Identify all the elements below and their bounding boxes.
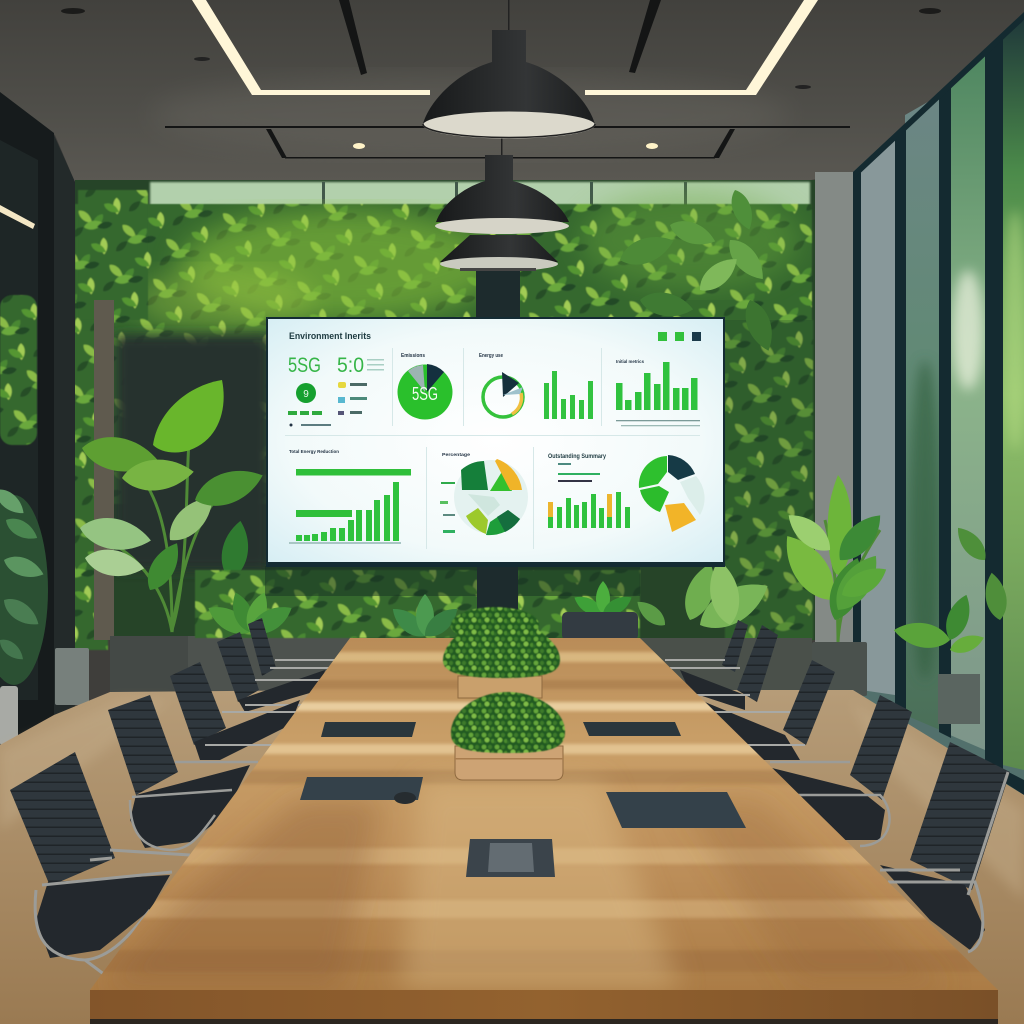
lamp 1 bbox=[423, 30, 595, 138]
far centre chair bbox=[562, 612, 638, 640]
ceiling light strip bbox=[192, 0, 818, 95]
bottom right bar chart: Outstanding Summary bbox=[548, 454, 607, 460]
donut chart with bars: Energy use bbox=[479, 353, 503, 359]
pots and planters bbox=[55, 636, 812, 705]
far table bush bbox=[451, 607, 539, 643]
bottom centre segmented pie: Percentage bbox=[442, 452, 471, 457]
dashboard header: Environment Inerits bbox=[289, 331, 371, 342]
large wall leaves upper right bbox=[616, 187, 779, 355]
bottom left bar chart: Total Energy Reduction bbox=[289, 449, 339, 454]
window strip above plants bbox=[150, 182, 810, 208]
tablets on table bbox=[300, 722, 746, 828]
chair left 3 bbox=[170, 662, 300, 760]
chair right 1 bbox=[880, 742, 1010, 952]
wall display bbox=[266, 317, 725, 567]
chair right 2 bbox=[760, 695, 912, 846]
lamp 2 bbox=[435, 120, 569, 234]
column behind screen bbox=[476, 268, 520, 613]
panel separators bbox=[285, 348, 700, 549]
large tropical plant left bbox=[77, 380, 268, 632]
pie chart 5SG: 5SG bbox=[412, 384, 438, 404]
left hanging vines bbox=[56, 190, 148, 650]
bottom left bar chart bbox=[289, 449, 411, 544]
metric panel: 5:0 bbox=[337, 354, 364, 377]
dashboard header bbox=[289, 331, 701, 342]
pot bbox=[0, 686, 18, 746]
chair left 4 bbox=[217, 632, 325, 712]
left dark wall bbox=[0, 92, 75, 745]
chair left 1 bbox=[10, 752, 190, 975]
ceiling bbox=[0, 0, 1024, 182]
bottom right donut chart bbox=[639, 455, 705, 532]
chairs on far side, left row bbox=[10, 618, 340, 975]
ceiling rails bbox=[165, 0, 850, 158]
chair left 5 bbox=[248, 618, 340, 676]
lamp 3 bbox=[440, 235, 558, 271]
chair right 4 bbox=[670, 625, 778, 710]
green wall bbox=[75, 180, 815, 640]
chair right 5 bbox=[665, 620, 748, 672]
metric panel: 9 bbox=[303, 389, 309, 400]
chairs on far side, right row bbox=[665, 620, 1010, 952]
keyboard bbox=[466, 839, 555, 877]
hanging pendant lamps bbox=[423, 0, 595, 271]
conference table bbox=[80, 638, 1024, 1024]
metric panel: 5SG bbox=[288, 354, 321, 377]
chair right 3 bbox=[700, 660, 835, 760]
metric panel bbox=[288, 354, 384, 426]
mouse bbox=[394, 792, 416, 804]
pie chart 5SG: Emissions bbox=[401, 353, 425, 359]
right glass wall bbox=[815, 12, 1024, 800]
near centre planter bbox=[451, 692, 565, 780]
wood grain bands bbox=[80, 652, 1024, 990]
pie chart 5SG bbox=[398, 353, 452, 420]
donut chart with bars bbox=[479, 353, 593, 419]
window frames bbox=[853, 12, 1024, 795]
plant outside the window bbox=[892, 522, 1010, 724]
low bushes under the screen bbox=[195, 558, 776, 643]
left edge plant bbox=[0, 295, 48, 746]
top right bar chart bbox=[616, 359, 700, 426]
far centre planter bbox=[443, 620, 560, 698]
chair left 2 bbox=[108, 695, 258, 850]
large tropical plant right bbox=[774, 475, 892, 696]
floor bbox=[0, 690, 1024, 1024]
top right bar chart: Initial metrics bbox=[616, 359, 644, 364]
table front edge bbox=[90, 990, 998, 1019]
bottom right bar chart bbox=[548, 454, 630, 528]
downlights bbox=[61, 8, 941, 149]
bottom centre segmented pie bbox=[440, 452, 528, 535]
